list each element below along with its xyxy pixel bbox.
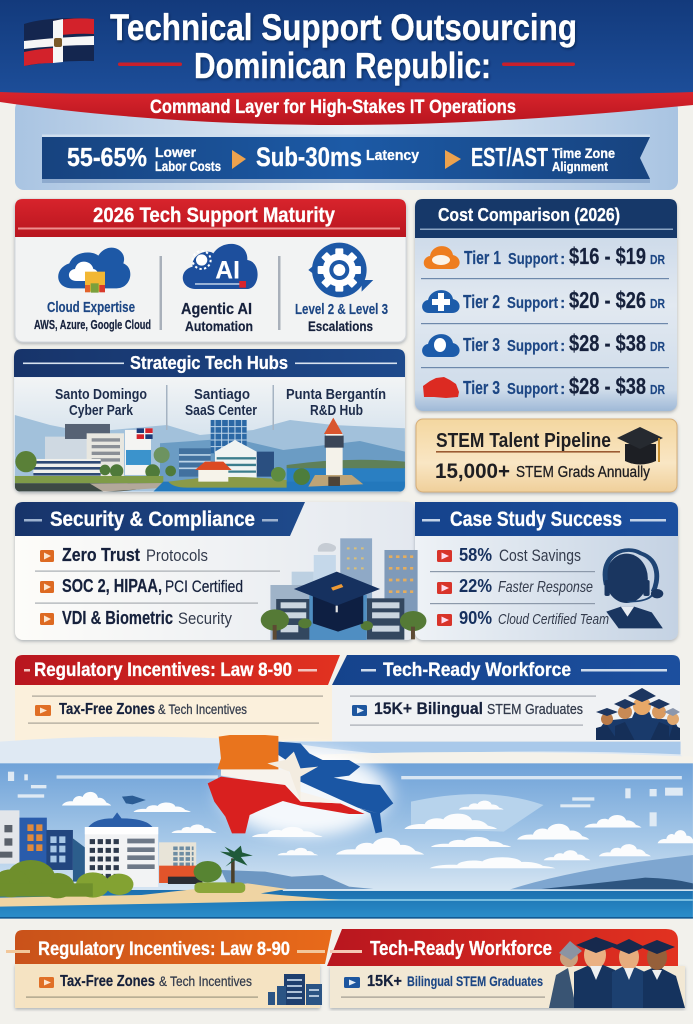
arrow <box>445 150 461 169</box>
heading: STEM Talent Pipeline <box>436 430 611 452</box>
row: tier 1: $16 - $19 <box>569 243 646 269</box>
hub: Santiago: Santiago <box>194 386 250 403</box>
icon: Dominican Republic flag <box>24 18 94 66</box>
row: tier 3 repeat: DR <box>650 383 665 397</box>
item: bilingual graduates: STEM Graduates <box>487 702 583 718</box>
item: cost savings: Cost Savings <box>499 546 581 565</box>
hub header <box>14 349 405 377</box>
title: Technical Support Outsourcing <box>110 7 577 48</box>
item: bilingual graduates: 15K+ Bilingual <box>374 699 483 718</box>
row: tier 2: DR <box>650 297 665 311</box>
hub: Santiago <box>185 386 257 419</box>
heading: 2026 Tech Support Maturity <box>93 204 335 227</box>
sea and beach <box>0 883 693 919</box>
item: certifications <box>40 576 243 596</box>
row: tier 3: DR <box>650 340 665 354</box>
arrow <box>232 150 246 169</box>
row: tier 1: Tier 1 <box>464 248 501 268</box>
stat: labor costs: Lower <box>155 145 197 160</box>
stat: time zone: EST/AST <box>471 142 548 172</box>
panel: strategic tech hubs <box>14 349 405 492</box>
header banner <box>0 0 693 125</box>
item: tax-free zones: & Tech Incentives <box>158 702 247 717</box>
hub: Santo Domingo: Cyber Park <box>69 402 134 419</box>
panel: cost comparison <box>415 199 677 411</box>
panel: security and compliance <box>15 502 415 640</box>
map: Dominican Republic <box>208 735 393 833</box>
label: level 2 and level 3: Escalations <box>308 318 373 334</box>
panel: case study success <box>415 502 678 640</box>
item: tax-free zones: Tax-Free Zones <box>59 701 155 718</box>
row: tier 3: Tier 3 <box>463 335 500 355</box>
label: cloud expertise: AWS, Azure, Google Cloud <box>34 317 151 332</box>
item: certifications: SOC 2, HIPAA, <box>62 576 162 596</box>
hub: Punta Bergantin: Punta Bergantín <box>286 386 386 403</box>
subtitle: Command Layer for High-Stakes IT Operations <box>150 97 516 118</box>
heading: Regulatory Incentives: Law 8-90 <box>34 660 292 681</box>
label: level 2 and level 3 <box>295 301 388 334</box>
hub: Santo Domingo: Santo Domingo <box>55 386 147 403</box>
heading: Strategic Tech Hubs <box>130 353 288 373</box>
stat: labor costs: 55-65% <box>67 142 147 172</box>
item: cloud certified team <box>437 608 609 628</box>
title <box>110 7 577 86</box>
title: Dominican Republic: <box>194 45 491 86</box>
panel: tech-ready workforce (lower) <box>327 929 685 1008</box>
item: bilingual graduates: 15K+ <box>367 973 402 990</box>
label: cloud expertise <box>34 300 151 332</box>
item: zero trust: Zero Trust <box>62 545 140 565</box>
item: faster response <box>437 576 593 596</box>
label: cloud expertise: Cloud Expertise <box>47 300 135 316</box>
icon: cloud expertise <box>58 248 130 293</box>
row: tier 3 <box>422 330 665 357</box>
hub: Punta Bergantin <box>286 386 386 419</box>
row: tier 2: : <box>560 295 565 312</box>
hub: Punta Bergantin: R&D Hub <box>310 402 363 419</box>
icon: graduates group <box>596 688 680 741</box>
row: tier 2 <box>422 287 665 313</box>
item: VDI and biometric: Security <box>178 609 232 628</box>
item: cloud certified team: 90% <box>459 608 492 628</box>
item: bilingual graduates: Bilingual STEM Graduates <box>407 973 543 989</box>
item: cloud certified team: Cloud Certified Team <box>498 611 609 628</box>
row: tier 1 <box>424 243 665 269</box>
stat: latency: Sub-30ms <box>256 142 362 172</box>
stat: STEM grads: STEM Grads Annually <box>516 464 650 481</box>
coastal buildings <box>0 810 202 887</box>
row: tier 2: $20 - $26 <box>569 287 646 313</box>
hub: Santiago: SaaS Center <box>185 402 257 419</box>
label: agentic AI: Automation <box>185 318 253 334</box>
illustration: coastal landscape with map <box>0 735 693 919</box>
icon: support agent headset <box>605 550 663 628</box>
item: faster response: Faster Response <box>498 579 593 596</box>
icon: server buildings <box>268 974 322 1005</box>
heading: Cost Comparison (2026) <box>438 205 620 225</box>
icon: escalation gear <box>308 243 373 297</box>
stat: labor costs: Labor Costs <box>155 159 221 174</box>
hub: Santo Domingo <box>55 386 147 419</box>
icon: agentic AI: AI <box>215 256 240 284</box>
item: cost savings <box>437 545 581 565</box>
row: tier 3: : <box>560 338 565 355</box>
panel: regulatory incentives <box>15 655 340 741</box>
heading: Tech-Ready Workforce <box>383 660 571 681</box>
item: tax-free zones <box>39 973 252 990</box>
row: tier 3 repeat: : <box>560 381 565 398</box>
row: tier 3 repeat: Support <box>507 381 559 398</box>
row: tier 1: : <box>560 251 565 268</box>
row: tier 3: Support <box>507 338 559 355</box>
panel: 2026 tech support maturity <box>15 199 406 342</box>
item: zero trust: Protocols <box>146 546 208 565</box>
icon: graduation cap <box>617 427 663 464</box>
row: tier 1: Support <box>508 251 559 268</box>
heading: Tech-Ready Workforce <box>370 938 552 960</box>
item: cost savings: 58% <box>459 545 492 565</box>
scene: tech hubs illustration <box>15 378 405 492</box>
illustration: campus and graduation cap <box>261 538 426 640</box>
item: tax-free zones: & Tech Incentives <box>159 973 252 989</box>
row: tier 2: Tier 2 <box>463 292 500 312</box>
item: certifications: PCI Certified <box>165 577 243 596</box>
heading: Case Study Success <box>450 508 622 531</box>
stat: STEM grads <box>435 460 650 483</box>
stat: labor costs <box>67 142 221 174</box>
panel: key stats backdrop <box>15 100 678 190</box>
label: agentic AI <box>181 301 253 334</box>
panel: STEM talent pipeline <box>416 419 677 492</box>
row: tier 3: $28 - $38 <box>569 330 646 356</box>
row: tier 3 repeat <box>423 373 665 399</box>
item: bilingual graduates <box>352 699 583 718</box>
panel: regulatory incentives (lower) <box>6 930 332 1008</box>
key stats ribbon <box>42 134 650 183</box>
palm tree and foliage <box>0 846 253 898</box>
stat: STEM grads: 15,000+ <box>435 460 510 483</box>
icon: graduates group <box>549 937 685 1008</box>
item: bilingual graduates <box>344 973 543 990</box>
item: tax-free zones <box>35 701 247 718</box>
row: tier 2: Support <box>507 295 559 312</box>
row: tier 1: DR <box>650 253 665 267</box>
stat: time zone: Time Zone <box>552 146 615 161</box>
label: agentic AI: Agentic AI <box>181 301 252 318</box>
stat: time zone: Alignment <box>552 159 609 174</box>
row: tier 3 repeat: $28 - $38 <box>569 373 646 399</box>
stat: latency: Latency <box>366 147 420 164</box>
row: tier 3 repeat: Tier 3 <box>463 378 500 398</box>
heading: Regulatory Incentives: Law 8-90 <box>38 939 290 960</box>
item: zero trust <box>40 545 208 565</box>
item: tax-free zones: Tax-Free Zones <box>60 973 155 990</box>
label: level 2 and level 3: Level 2 & Level 3 <box>295 301 388 318</box>
item: faster response: 22% <box>459 576 492 596</box>
item: VDI and biometric: VDI & Biometric <box>62 608 173 628</box>
icon: agentic AI <box>183 244 258 289</box>
panel: tech-ready workforce <box>332 655 680 741</box>
heading: Security & Compliance <box>50 508 255 531</box>
